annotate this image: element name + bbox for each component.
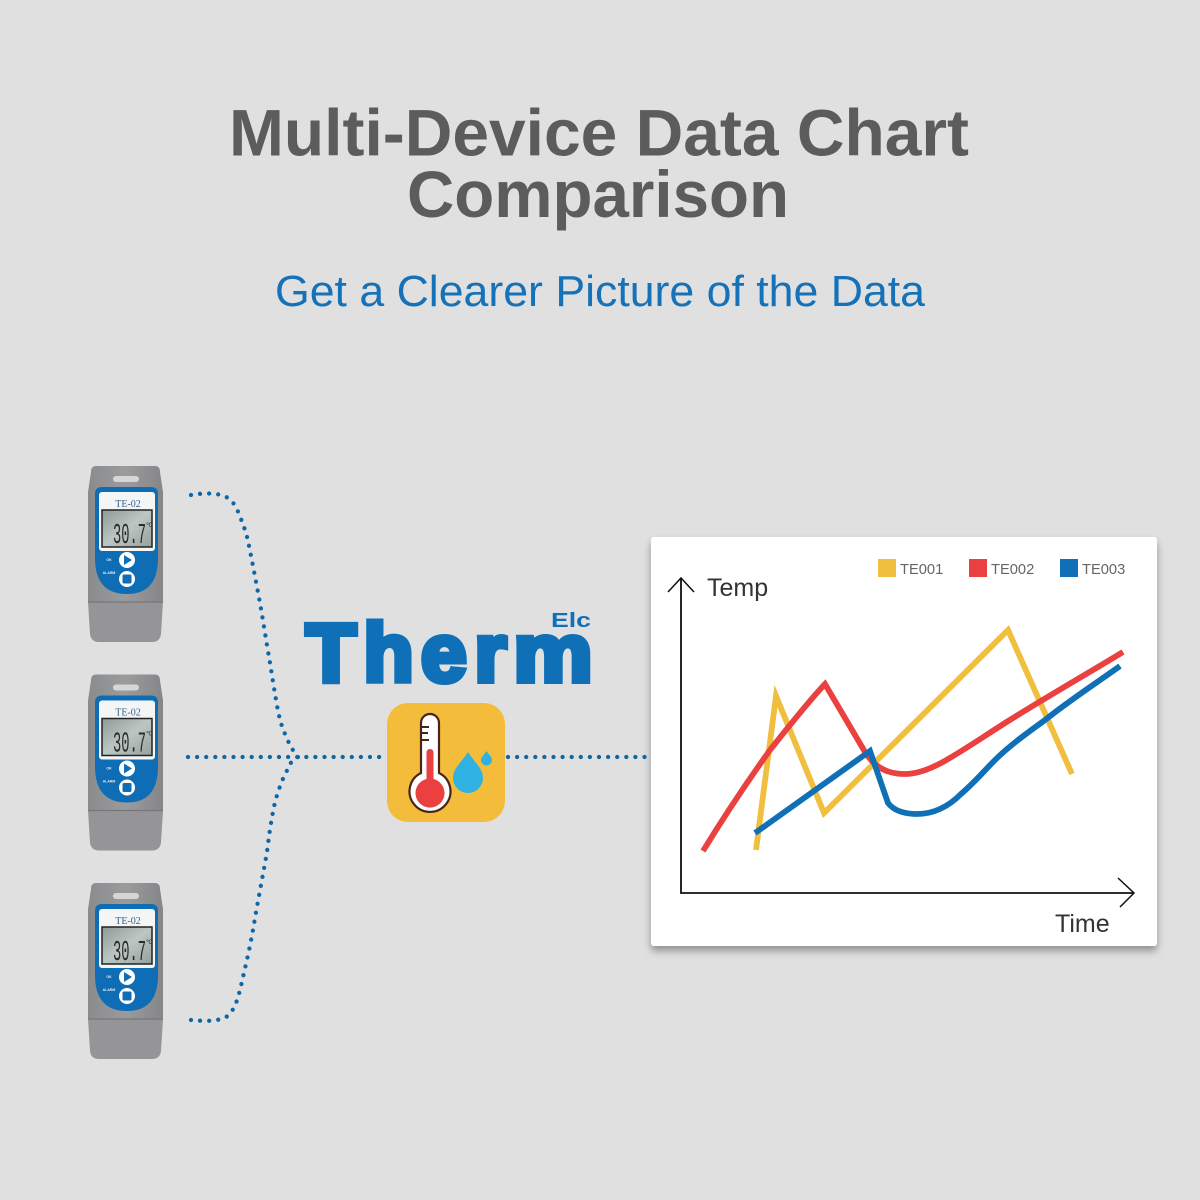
- logo: [306, 608, 592, 699]
- device 3: TE-02: [115, 916, 141, 927]
- title: Multi-Device Data Chart: [229, 96, 969, 170]
- logo: e: [421, 608, 467, 699]
- legend: TE002: [991, 562, 1034, 578]
- axis label: Temp: Temp: [707, 574, 768, 602]
- device 1: ℃: [146, 523, 153, 529]
- icon: thermometer and water drops: [387, 703, 505, 822]
- legend: TE001: [900, 562, 943, 578]
- device 1: 30.7: [113, 519, 146, 552]
- device 2: TE-02: [115, 708, 141, 718]
- axis label: Time: Time: [1055, 910, 1110, 938]
- chart axes: [668, 578, 1134, 907]
- device 2: ℃: [146, 732, 153, 738]
- device 1: OK: [106, 558, 112, 562]
- title: [229, 96, 969, 231]
- subtitle: Get a Clearer Picture of the Data: [275, 267, 926, 316]
- device 2: 30.7: [113, 728, 146, 760]
- line: TE001: [756, 630, 1072, 850]
- logo: r: [474, 608, 506, 699]
- logo: Elc: [551, 610, 591, 632]
- device 1: TE-02: [115, 499, 141, 510]
- logo: m: [514, 608, 592, 699]
- device 2: [88, 674, 163, 850]
- title: Comparison: [407, 157, 789, 231]
- device 3: [88, 883, 163, 1059]
- device 1: [88, 466, 163, 642]
- device 3: ALARM: [103, 988, 115, 992]
- device 3: ℃: [146, 940, 153, 946]
- logo: h: [364, 608, 414, 699]
- legend: [878, 559, 1125, 578]
- dotted connectors: [188, 493, 648, 1021]
- legend: TE003: [1082, 562, 1125, 578]
- panel: chart: [651, 537, 1157, 946]
- line: TE002: [703, 652, 1123, 851]
- device 2: OK: [106, 766, 112, 770]
- line: TE003: [755, 666, 1120, 833]
- device 3: 30.7: [113, 936, 146, 969]
- device 3: OK: [106, 975, 112, 979]
- device 1: ALARM: [103, 571, 115, 575]
- logo: T: [306, 608, 356, 699]
- device 2: ALARM: [103, 780, 115, 784]
